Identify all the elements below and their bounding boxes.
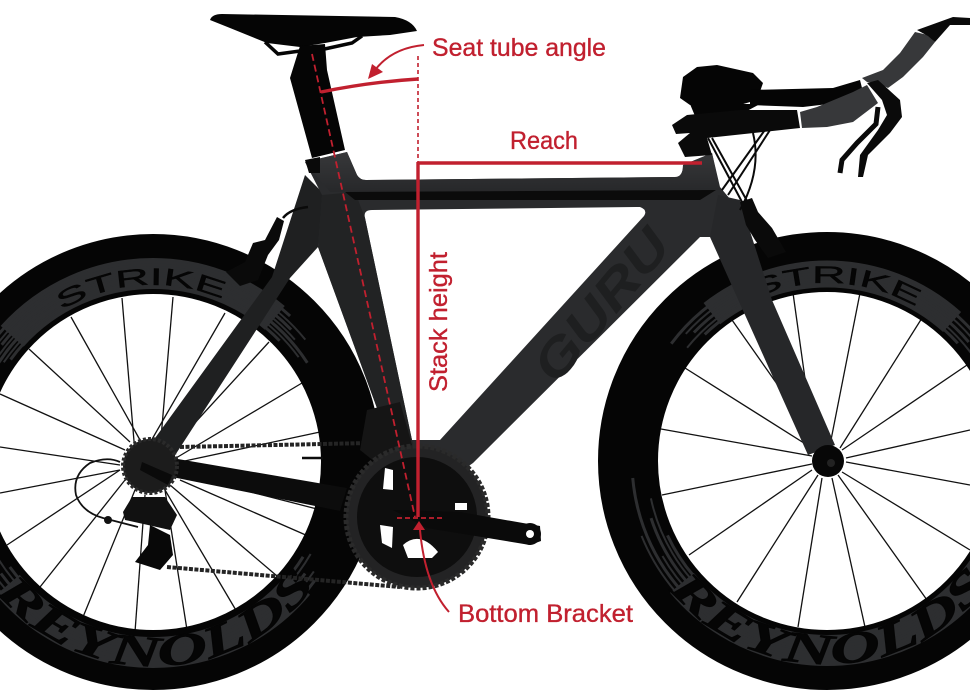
chain stay: [175, 459, 320, 506]
chain: [167, 443, 400, 587]
rim band: top: [0, 258, 308, 364]
red measurement lines: [312, 54, 702, 518]
label: reach: Reach: [510, 127, 578, 155]
saddle and seatpost: [210, 14, 417, 158]
front brake and cables: [707, 131, 778, 243]
rim text: STRIKE: STRIKE: [764, 266, 922, 306]
front derailleur: [360, 402, 412, 462]
chainring and crank: [346, 446, 541, 588]
rear brake: [226, 207, 308, 286]
rim text: STRIKE: STRIKE: [58, 268, 226, 307]
frame: [305, 152, 729, 466]
aero bars and stem: [672, 17, 970, 177]
rim band: bottom: [631, 478, 970, 666]
seat stay: [150, 175, 325, 460]
rear derailleur: [75, 459, 177, 570]
rim band: top: [670, 260, 970, 353]
arrow: seat tube angle: [368, 45, 424, 79]
label: seat tube angle: Seat tube angle: [432, 34, 606, 62]
rear wheel: [0, 234, 374, 690]
rim band: bottom: [0, 554, 316, 668]
cassette: [123, 439, 177, 493]
front wheel: [598, 232, 970, 690]
label: stack height: Stack height: [425, 252, 453, 392]
fork: [710, 195, 844, 477]
label: bottom bracket: Bottom Bracket: [458, 600, 633, 628]
logo on down tube: GURU: [522, 216, 683, 393]
arrow: bottom bracket: [413, 521, 449, 612]
